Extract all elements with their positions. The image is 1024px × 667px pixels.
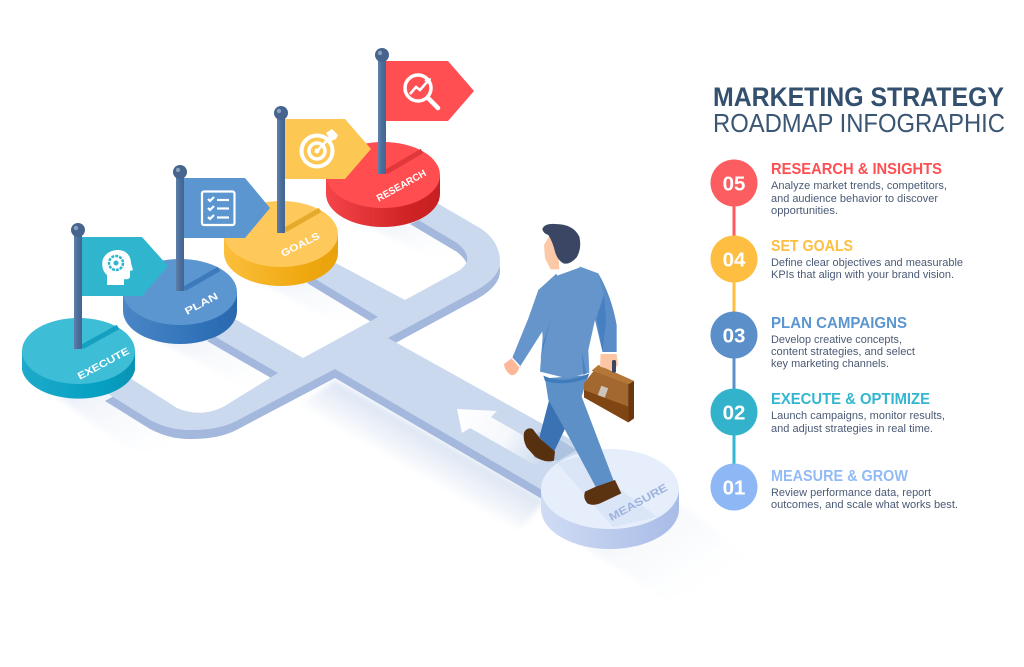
back shoe: [524, 428, 555, 461]
step 02 execute and optimize: Launch campaigns, monitor results,: [771, 410, 945, 422]
step: plan: [123, 165, 270, 344]
step 03 plan campaigns: Develop creative concepts,: [771, 334, 902, 346]
step 01 measure and grow: Review performance data, report: [771, 487, 931, 499]
step 02 execute and optimize: [710, 388, 945, 436]
back leg: [539, 397, 567, 452]
road network: [105, 203, 600, 509]
step 05 research and insights: 05: [723, 172, 745, 196]
front shoe: [584, 480, 621, 505]
front leg: [545, 375, 614, 487]
flag: execute: [82, 237, 168, 296]
step 04 set goals: SET GOALS: [771, 238, 853, 255]
far hand: [600, 354, 618, 371]
step 02 execute and optimize: EXECUTE & OPTIMIZE: [771, 391, 930, 408]
flag: research: [386, 61, 474, 121]
disc: measure: [541, 449, 679, 549]
timeline connectors: [732, 183, 736, 487]
disc: plan: PLAN: [183, 291, 220, 318]
step: goals: [224, 106, 371, 286]
face: [544, 235, 559, 269]
pole: goals: [274, 106, 288, 233]
pole: plan: [173, 165, 187, 291]
step 05 research and insights: RESEARCH & INSIGHTS: [771, 161, 942, 178]
disc: goals: [224, 201, 338, 286]
step 02 execute and optimize: and adjust strategies in real time.: [771, 423, 933, 435]
disc: execute: [22, 318, 135, 399]
disc: execute: EXECUTE: [76, 346, 132, 383]
step 04 set goals: Define clear objectives and measurable: [771, 257, 963, 269]
disc: research: [326, 142, 440, 227]
title: [713, 82, 1005, 138]
near hand: [504, 358, 519, 375]
step 04 set goals: 04: [723, 248, 746, 272]
briefcase: [584, 365, 634, 422]
step 03 plan campaigns: PLAN CAMPAIGNS: [771, 315, 907, 332]
step 01 measure and grow: 01: [723, 476, 745, 500]
hair: [542, 224, 580, 264]
step 05 research and insights: [710, 160, 947, 217]
step 04 set goals: KPIs that align with your brand vision.: [771, 269, 954, 281]
briefcase handle: [612, 360, 616, 373]
far cuff: [602, 352, 617, 354]
pole: execute: [71, 223, 85, 349]
ground shadows: [55, 210, 790, 600]
step 05 research and insights: and audience behavior to discover: [771, 193, 938, 205]
disc: measure: MEASURE: [607, 482, 670, 524]
flag: goals: [285, 119, 371, 179]
step 04 set goals: [710, 236, 963, 282]
arrow on road: [457, 409, 552, 465]
step 03 plan campaigns: key marketing channels.: [771, 358, 889, 370]
waistband: [543, 373, 589, 383]
icon: head with gear: [102, 250, 133, 285]
collar: [555, 264, 580, 276]
step 05 research and insights: opportunities.: [771, 205, 838, 217]
icon: magnifier with growth arrow: [405, 75, 438, 108]
far arm: [595, 273, 617, 353]
title: MARKETING STRATEGY: [713, 82, 1004, 112]
step 02 execute and optimize: 02: [723, 402, 745, 424]
step 01 measure and grow: MEASURE & GROW: [771, 468, 909, 485]
step 01 measure and grow: [710, 464, 958, 511]
step 03 plan campaigns: [710, 312, 915, 370]
step 01 measure and grow: outcomes, and scale what works best.: [771, 499, 958, 511]
disc: research: RESEARCH: [375, 168, 428, 204]
icon: target: [302, 129, 338, 166]
flag: plan: [184, 178, 270, 238]
jacket: [538, 267, 604, 378]
disc: goals: GOALS: [279, 231, 322, 260]
near arm: [512, 290, 553, 367]
step 03 plan campaigns: content strategies, and select: [771, 346, 915, 358]
step 05 research and insights: Analyze market trends, competitors,: [771, 180, 947, 192]
shoe shadow: [525, 430, 577, 461]
step 03 plan campaigns: 03: [723, 324, 745, 348]
step: execute: [22, 223, 168, 399]
businessman walking: [504, 224, 634, 505]
disc: plan: [123, 259, 237, 344]
icon: checklist: [202, 192, 234, 225]
pole: research: [375, 48, 389, 174]
step: research: [326, 48, 474, 227]
title: ROADMAP INFOGRAPHIC: [713, 110, 1005, 138]
